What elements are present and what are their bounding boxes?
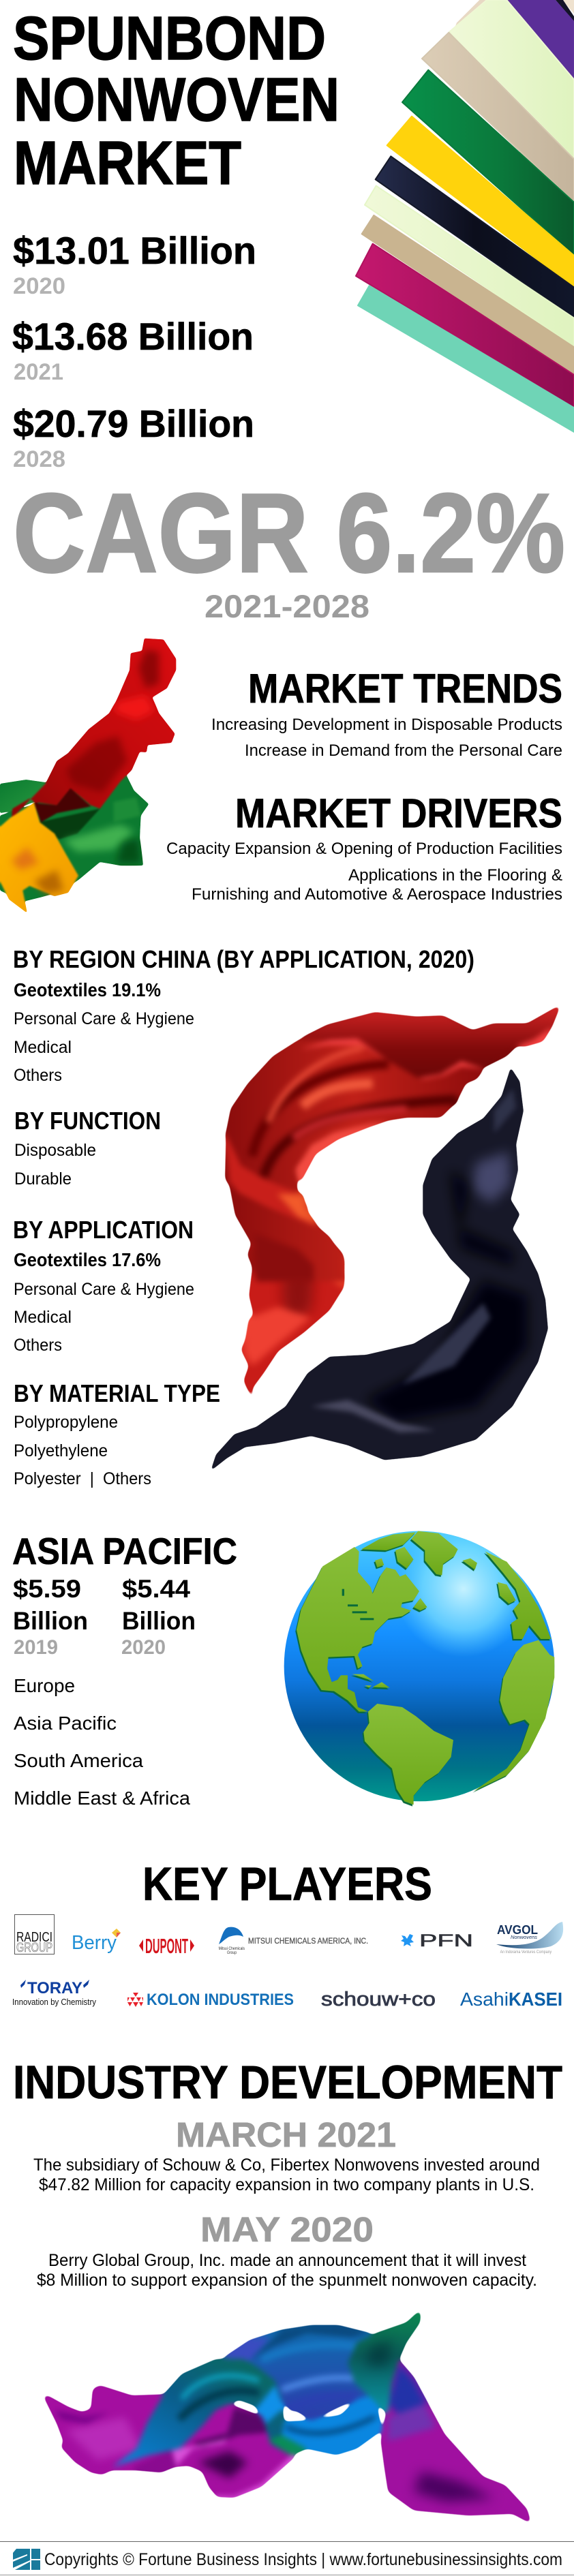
segment: by region china xyxy=(13,945,474,1085)
stat: 2028 market size: 2028 xyxy=(13,446,65,472)
drivers list xyxy=(166,840,562,904)
development: march 2021: The subsidiary of Schouw & Co, Fibertex Nonwovens invested around xyxy=(33,2156,540,2175)
stat: 2028 market size xyxy=(13,402,254,472)
stat: 2021 market size: 2021 xyxy=(14,359,63,385)
logo: schouw and co: schouw+co xyxy=(321,1989,436,2010)
CAGR period: 2021-2028 xyxy=(205,588,369,624)
development: march 2021 xyxy=(33,2115,540,2194)
title: NONWOVEN xyxy=(14,66,339,134)
title: SPUNBOND xyxy=(13,5,326,73)
logo: toray xyxy=(12,1979,96,2007)
segment: by material type: Polyethylene xyxy=(14,1441,108,1460)
region list: Europe xyxy=(14,1675,75,1696)
segment: by application: BY APPLICATION xyxy=(13,1216,194,1244)
logo: avgol xyxy=(496,1922,563,1954)
heading: asia pacific: ASIA PACIFIC xyxy=(12,1530,237,1572)
image: purple and blue scarf xyxy=(42,2309,532,2524)
trends list: Increasing Development in Disposable Products xyxy=(211,716,562,734)
logo: pfn xyxy=(401,1931,473,1950)
logo: avgol: Nonwovens xyxy=(511,1935,538,1940)
panel: trends and drivers xyxy=(0,639,562,913)
scarf: right green wrap xyxy=(348,2309,421,2414)
stat: 2019: 2019 xyxy=(14,1636,58,1659)
segment: by function: Disposable xyxy=(14,1141,96,1160)
segment: by application xyxy=(13,1216,194,1355)
segment: by function xyxy=(14,1107,161,1189)
segment: by region china: Geotextiles 19.1% xyxy=(14,979,161,1000)
region list: Asia Pacific xyxy=(14,1713,117,1734)
segment: by application: Geotextiles 17.6% xyxy=(14,1249,161,1270)
development: march 2021: $47.82 Million for capacity expansion in two company plants in U.S. xyxy=(39,2175,534,2194)
region list: Middle East & Africa xyxy=(14,1788,190,1809)
heading: key players: KEY PLAYERS xyxy=(142,1858,432,1910)
segment: by material type: BY MATERIAL TYPE xyxy=(14,1379,220,1407)
stat: 2021 market size xyxy=(12,315,254,385)
panel: key players xyxy=(12,1858,563,2010)
logo: avgol: An Indorama Ventures Company xyxy=(500,1950,552,1954)
development: march 2021: MARCH 2021 xyxy=(176,2115,396,2154)
segment: by application: Medical xyxy=(14,1308,72,1327)
scarf: left teal wrap xyxy=(112,2359,307,2467)
logo: asahi kasei: KASEI xyxy=(509,1989,562,2010)
logo: mitsui chemicals: Mitsui Chemicals xyxy=(219,1947,245,1951)
stat: 2019: Billion xyxy=(13,1607,88,1635)
stat: 2028 market size: $20.79 Billion xyxy=(13,402,254,445)
segment: by material type: Polyester | Others xyxy=(14,1469,151,1488)
image: stacked fabric swatches xyxy=(356,0,574,432)
segment: by region china: BY REGION CHINA (BY APPLICATION, 2020) xyxy=(13,945,474,973)
development: may 2020: $8 Million to support expansion of the spunmelt nonwoven capacity. xyxy=(37,2271,537,2290)
drivers list: Capacity Expansion & Opening of Production Facilities xyxy=(166,840,562,858)
stat: 2020 xyxy=(121,1575,196,1659)
scarf: right purple tail xyxy=(380,2360,532,2524)
scarf: blue center xyxy=(223,2325,382,2455)
image: black scarf xyxy=(211,1067,548,1471)
development: may 2020 xyxy=(37,2210,537,2290)
title: MARKET xyxy=(14,129,241,198)
region list: South America xyxy=(14,1750,143,1771)
segment: by function: BY FUNCTION xyxy=(14,1107,161,1135)
segment: by region china: Personal Care & Hygiene xyxy=(14,1009,194,1028)
logo: mitsui chemicals: Group xyxy=(227,1951,237,1955)
segment: by material type: Polypropylene xyxy=(14,1413,118,1432)
logo: mitsui chemicals xyxy=(219,1927,368,1955)
logo: kolon industries: KOLON INDUSTRIES xyxy=(147,1991,294,2009)
logo: asahi kasei xyxy=(460,1989,562,2010)
stat: 2019: $5.59 xyxy=(13,1575,81,1603)
region list xyxy=(14,1675,190,1809)
logo: pfn: PFN xyxy=(419,1931,473,1950)
lower red fold xyxy=(235,1192,344,1402)
icon: fortune business insights logo xyxy=(13,2549,40,2570)
panel: regional xyxy=(12,1521,554,1809)
logo: toray: Innovation by Chemistry xyxy=(12,1997,96,2007)
icon: globe xyxy=(284,1521,554,1805)
stat: 2020: Billion xyxy=(122,1607,196,1635)
logo: radici group xyxy=(15,1915,55,1955)
stat: 2020 market size: 2020 xyxy=(13,273,65,299)
title xyxy=(13,5,339,198)
segment: by region china: Others xyxy=(14,1066,62,1085)
upper red fold xyxy=(225,1004,561,1281)
panel: hero xyxy=(12,0,574,624)
logo: avgol: AVGOL xyxy=(497,1923,538,1937)
logo: toray: TORAY xyxy=(27,1979,82,1997)
logo: berry: Berry xyxy=(72,1932,117,1954)
development: may 2020: MAY 2020 xyxy=(200,2210,374,2249)
segment: by application: Others xyxy=(14,1336,62,1355)
trends list xyxy=(211,716,562,760)
logo: radici group: GROUP xyxy=(16,1941,52,1955)
stat: 2020: $5.44 xyxy=(122,1575,190,1603)
stat: 2020 market size: $13.01 Billion xyxy=(13,229,256,272)
logo: mitsui chemicals: MITSUI CHEMICALS AMERICA, INC. xyxy=(248,1936,368,1946)
segment: by region china: Medical xyxy=(14,1038,72,1057)
stat: 2021 market size: $13.68 Billion xyxy=(12,315,254,358)
drivers list: Applications in the Flooring & xyxy=(348,866,562,885)
segment: by function: Durable xyxy=(14,1169,72,1189)
logo: dupont xyxy=(139,1934,194,1958)
stat: 2019 xyxy=(13,1575,88,1659)
scarf: left purple xyxy=(42,2385,295,2498)
segment: by material type xyxy=(14,1379,220,1488)
panel: segmentation xyxy=(13,945,561,1488)
logo: radici group: RADICI xyxy=(16,1930,52,1945)
development: may 2020: Berry Global Group, Inc. made an announcement that it will invest xyxy=(48,2251,526,2270)
stat: 2020 market size xyxy=(13,229,256,299)
trends list: Increase in Demand from the Personal Care xyxy=(245,741,562,760)
logo: asahi kasei: Asahi xyxy=(460,1989,509,2010)
image: red green yellow fabric xyxy=(0,639,176,913)
segment: by application: Personal Care & Hygiene xyxy=(14,1280,194,1299)
panel: industry development xyxy=(13,2056,562,2524)
drivers list: Furnishing and Automotive & Aerospace Industries xyxy=(192,885,562,904)
logo: dupont: DUPONT xyxy=(145,1934,188,1958)
panel: footer xyxy=(0,2541,574,2575)
image: red scarf xyxy=(225,1004,561,1402)
stat: 2020: 2020 xyxy=(121,1636,166,1659)
